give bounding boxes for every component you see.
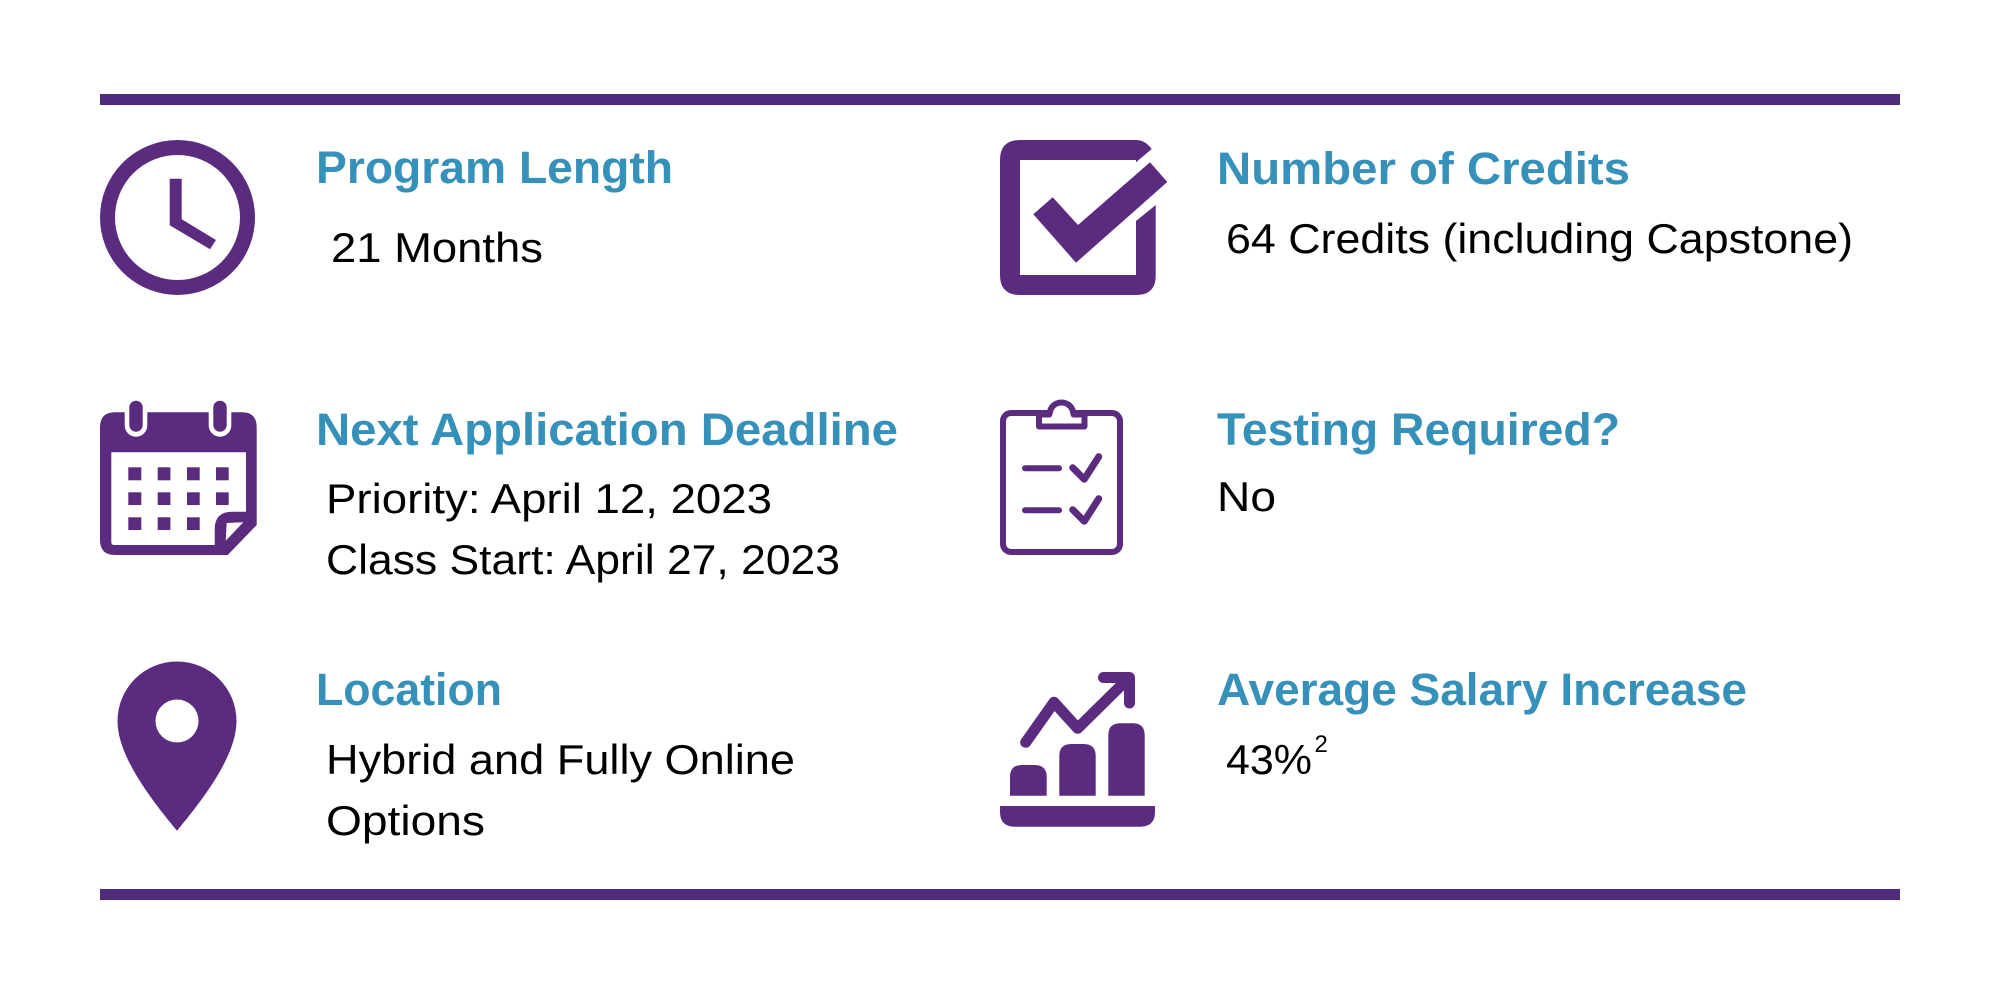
block: next application deadline: Next Application Deadline [316, 404, 898, 455]
block: average salary increase: 43% [1226, 736, 1312, 783]
block: program length [316, 142, 673, 271]
block: next application deadline: Class Start: April 27, 2023 [326, 536, 840, 583]
block: number of credits: 64 Credits (including Capstone) [1226, 215, 1853, 262]
block: average salary increase [1217, 664, 1747, 783]
block: location: Hybrid and Fully Online [326, 736, 795, 783]
block: average salary increase: 2 [1314, 731, 1328, 758]
block: program length: Program Length [316, 142, 673, 193]
icon: calendar [100, 399, 257, 555]
block: testing required: No [1217, 473, 1276, 520]
top rule [100, 94, 1900, 105]
block: testing required [1217, 404, 1620, 520]
block: next application deadline [316, 404, 898, 583]
block: location [316, 664, 795, 844]
icon: check box [1000, 140, 1167, 295]
block: program length: 21 Months [331, 224, 543, 271]
icon: clock [108, 148, 248, 288]
block: location: Location [316, 664, 502, 715]
block: number of credits [1217, 143, 1853, 262]
icon: clipboard checklist [1003, 402, 1120, 552]
block: location: Options [326, 797, 485, 844]
icon: location pin [118, 662, 236, 831]
block: testing required: Testing Required? [1217, 404, 1620, 455]
block: number of credits: Number of Credits [1217, 143, 1630, 194]
block: next application deadline: Priority: April 12, 2023 [326, 475, 772, 522]
bottom rule [100, 889, 1900, 900]
icon: rising bar chart [1000, 678, 1155, 827]
block: average salary increase: Average Salary Increase [1217, 664, 1747, 715]
